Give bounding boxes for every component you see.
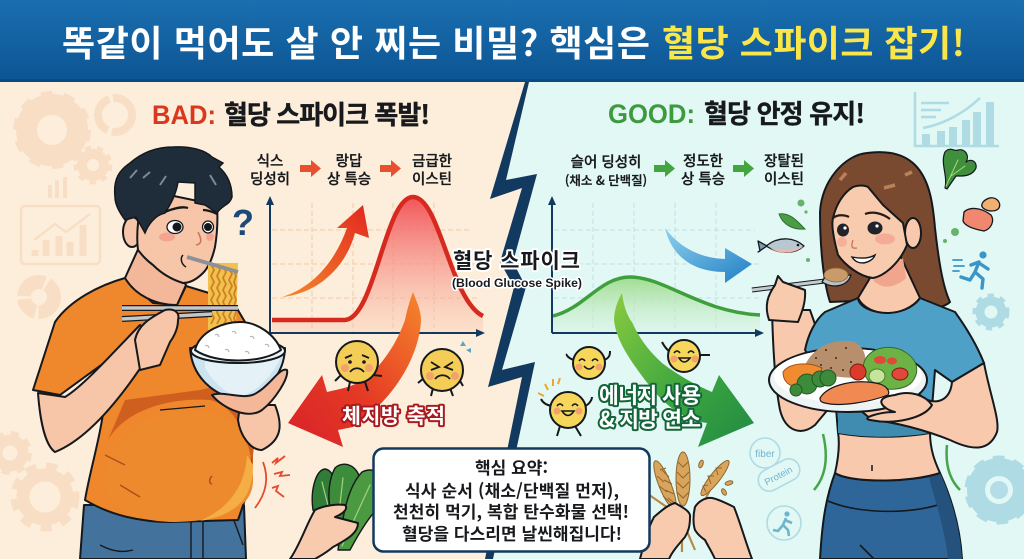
- hair back: [820, 152, 950, 309]
- ear: [123, 217, 141, 247]
- chopsticks at mouth: [187, 257, 238, 272]
- face details: [159, 207, 217, 267]
- salmon: [820, 382, 889, 404]
- text: energy use and fat burn: 에너지 사용: [599, 379, 701, 410]
- arrow: good step 2 to 3: [733, 160, 754, 177]
- shirt: [805, 298, 984, 437]
- label: blood glucose spike: 혈당 스파이크: [453, 245, 580, 275]
- leaves: [312, 464, 385, 550]
- dots near food: [798, 200, 959, 262]
- label: blood glucose spike: (Blood Glucose Spike): [452, 278, 582, 290]
- waist motion marks: [814, 434, 960, 490]
- right background panel: [493, 82, 1024, 559]
- question mark: ?: [232, 202, 254, 243]
- character: happy fat cell 1: [567, 347, 610, 379]
- belly pain marks: [255, 456, 290, 508]
- flow: good sequence: 상 특승: [681, 168, 725, 189]
- belly: [105, 406, 253, 522]
- rice bowl: [190, 322, 285, 399]
- character: happy fat cell 3: [538, 378, 592, 436]
- callout: key summary: 혈당을 다스리면 날씬해집니다!: [402, 520, 622, 545]
- pants: [820, 473, 962, 559]
- raised arm: [772, 310, 840, 431]
- flow: good sequence: 정도한: [683, 150, 723, 171]
- icon: growth chart: [915, 92, 999, 146]
- header banner: [0, 0, 1024, 82]
- icon: running person: [953, 251, 988, 288]
- text: energy use and fat burn: & 지방 연소: [599, 403, 701, 434]
- flow: bad sequence: 상 특승: [327, 168, 371, 189]
- spinach in hand: [290, 464, 385, 559]
- flow: bad sequence: [250, 150, 452, 189]
- arrow: step 2 to 3: [380, 160, 401, 177]
- orange shirt: [33, 278, 253, 522]
- left background decorative icons: [0, 95, 132, 528]
- jeans: [80, 505, 246, 559]
- wheat heads: [650, 452, 733, 511]
- chopsticks in hand: [122, 308, 238, 319]
- icon: large gear: [968, 459, 1024, 521]
- hand holding chopsticks: [135, 310, 178, 370]
- his left forearm: [238, 405, 280, 450]
- flow: bad sequence: 식스: [257, 150, 283, 171]
- ear: [905, 218, 921, 248]
- salad: [850, 347, 917, 389]
- plate of food: [769, 341, 927, 412]
- title highlighted part: 혈당 스파이크 잡기!: [662, 15, 965, 67]
- callout: key summary: 핵심 요약:: [475, 454, 548, 479]
- chart: bad glucose spike: [266, 196, 485, 337]
- flow: good sequence: [565, 150, 804, 189]
- heading: GOOD: 혈당 안정 유지!: [704, 94, 865, 131]
- his right arm: [38, 325, 160, 452]
- icon: fiber bubble: [750, 438, 780, 468]
- icon: fish: [758, 239, 804, 253]
- arrow: big red fat storage: [288, 292, 421, 447]
- spoon: [752, 268, 851, 290]
- flow: good sequence: 장탈된: [764, 150, 804, 171]
- left hand: [640, 503, 690, 559]
- right hand: [694, 498, 752, 559]
- stomach: [835, 432, 940, 480]
- noodles: [208, 263, 238, 330]
- heading: GOOD: [608, 94, 865, 131]
- hair highlights: [840, 172, 912, 188]
- brown rice: [805, 341, 865, 378]
- character: slim woman eating healthy: [752, 152, 998, 559]
- icon: floating spinach: [943, 149, 976, 189]
- flow: bad sequence: 랑답: [336, 150, 362, 171]
- label: blood glucose spike: [452, 245, 582, 290]
- character: overweight man eating: [33, 147, 290, 559]
- icon: runner circle: [767, 506, 801, 540]
- callout: key summary: 천천히 먹기, 복합 탄수화물 선택!: [393, 498, 629, 523]
- hair: [115, 147, 232, 233]
- arrow: good step 1 to 2: [654, 160, 675, 177]
- character: happy fat cell 2: [662, 340, 710, 372]
- character: sad fat cell 2: [418, 341, 471, 396]
- icon: protein pill: Protein: [763, 464, 795, 488]
- flow: good sequence: 슬어 딩성히: [571, 151, 641, 172]
- icon: floating salmon: [963, 198, 1000, 231]
- right background decorative icons: [750, 92, 1024, 540]
- neck: [858, 255, 920, 313]
- character: sad fat cell 1: [335, 341, 382, 391]
- hand under plate: [867, 393, 932, 422]
- wheat in hands: [640, 452, 752, 559]
- other arm: [860, 363, 998, 448]
- icon: fiber bubble: fiber: [755, 449, 775, 460]
- lightning divider: [485, 82, 537, 559]
- left background panel: [0, 82, 540, 559]
- flow: bad sequence: 딩성히: [250, 168, 290, 189]
- heading: BAD: BAD:: [152, 100, 216, 130]
- arrow: blue curved: [665, 228, 752, 283]
- arrow: rising red: [282, 205, 369, 297]
- neck shadow: [873, 258, 906, 287]
- hand: [290, 505, 358, 559]
- belly fold: [108, 380, 253, 470]
- face details: [833, 213, 895, 263]
- face: [137, 190, 217, 283]
- callout: key summary: 식사 순서 (채소/단백질 먼저),: [405, 477, 619, 502]
- hand with spoon: [767, 276, 805, 322]
- carrots: [783, 364, 822, 390]
- flow: bad sequence: 금급한: [412, 150, 452, 171]
- text: energy use and fat burn: [599, 379, 701, 434]
- title white part: 똑같이 먹어도 살 안 찌는 비밀? 핵심은: [62, 15, 650, 67]
- wheat stems: [642, 470, 720, 552]
- hand under bowl: [212, 370, 287, 414]
- text: fat accumulation: 체지방 축적: [342, 399, 445, 429]
- icon: leaf: [779, 214, 805, 229]
- callout: key summary: [374, 448, 650, 552]
- flow: good sequence: 이스틴: [764, 168, 804, 189]
- arrow: big green energy: [614, 293, 754, 447]
- chart: good stable glucose: [548, 196, 764, 337]
- face: [832, 186, 907, 278]
- flow: good sequence: (채소 & 단백질): [565, 170, 647, 189]
- flow: bad sequence: 이스틴: [412, 168, 452, 189]
- heading: BAD: 혈당 스파이크 폭발!: [224, 95, 430, 132]
- neck: [125, 245, 186, 305]
- hair highlights: [130, 170, 216, 185]
- heading: GOOD: GOOD:: [608, 99, 695, 129]
- arrow: step 1 to 2: [300, 160, 321, 177]
- broccoli: [790, 370, 836, 396]
- icon: protein pill: [754, 455, 804, 495]
